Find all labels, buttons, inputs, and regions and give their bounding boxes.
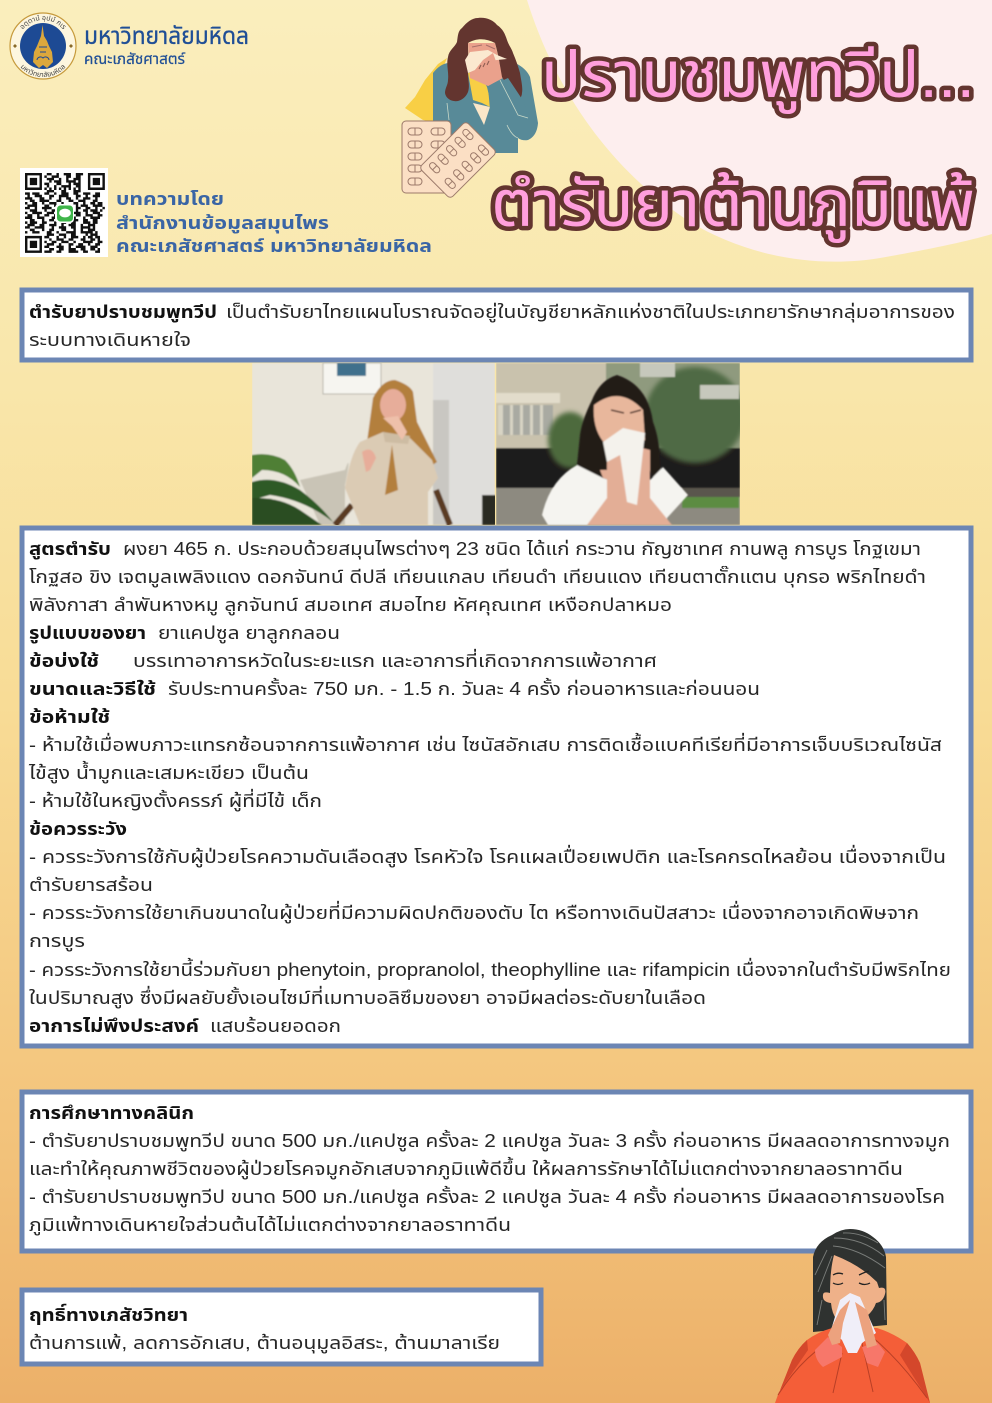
plant [252, 454, 300, 487]
precautions: - ควรระวังการใช้ยาเกินขนาดในผู้ป่วยที่มีความผิดปกติของตับ ไต หรือทางเดินปัสสาวะ เนื่องจากอาจเกิดพิษจาก [29, 900, 919, 925]
photo: woman outdoors [496, 363, 745, 525]
panel: intro [22, 290, 971, 360]
dosage [29, 677, 760, 699]
dosage form [29, 623, 340, 645]
dosage form: รูปแบบของยา [29, 623, 146, 644]
panel: pharmacology: ฤทธิ์ทางเภสัชวิทยา [29, 1303, 188, 1325]
contraindications: - ห้ามใช้เมื่อพบภาวะแทรกซ้อนจากการแพ้อากาศ เช่น ไซนัสอักเสบ การติดเชื้อแบคทีเรียที่มีอาการเจ็บบริเวณไซนัส [29, 732, 942, 755]
pink corner shape [527, 0, 992, 262]
university name: มหาวิทยาลัยมหิดล [84, 23, 249, 50]
precautions [29, 819, 951, 1010]
panel: clinical studies: และทำให้คุณภาพชีวิตของผู้ป่วยโรคจมูกอักเสบจากภูมิแพ้ดีขึ้น ให้ผลการรักษาได้ไม่แตกต่างจากยาลอราทาดีน [29, 1156, 903, 1181]
precautions: ตำรับยารสร้อน [29, 875, 153, 895]
panel: intro: ระบบทางเดินหายใจ [29, 330, 191, 350]
formula: พิลังกาสา ลำพันหางหมู ลูกจันทน์ สมอเทศ สมอไทย หัศคุณเทศ เหงือกปลาหมอ [29, 595, 672, 617]
illustration: woman with tissue [775, 1229, 930, 1403]
precautions: การบูร [29, 931, 85, 953]
author credit: คณะเภสัชศาสตร์ มหาวิทยาลัยมหิดล [116, 236, 432, 256]
title: ตำรับยาต้านภูมิแพ้ [491, 168, 975, 243]
adverse effects [29, 1016, 341, 1036]
university name [84, 23, 249, 68]
chair [335, 490, 450, 525]
university logo [9, 12, 77, 80]
indications [29, 648, 657, 671]
photo: woman indoors [252, 363, 496, 525]
sweater [345, 432, 438, 525]
title: ปราบชมพูทวีป... [541, 39, 975, 114]
precautions: - ควรระวังการใช้ยานี้ร่วมกับยา phenytoin, propranolol, theophylline และ rifampicin เนื่องจากในตำรับมีพริกไทย [29, 957, 951, 980]
contraindications [28, 707, 942, 813]
dosage form: ยาแคปซูล ยาลูกกลอน [158, 623, 340, 645]
dosage: รับประทานครั้งละ 750 มก. - 1.5 ก. วันละ 4 ครั้ง ก่อนอาหารและก่อนนอน [168, 677, 760, 699]
formula: สูตรตำรับ [29, 539, 111, 560]
illustration: woman sneezing with pills [402, 18, 538, 199]
panel: clinical studies: การศึกษาทางคลินิก [29, 1103, 194, 1123]
contraindications: - ห้ามใช้ในหญิงตั้งครรภ์ ผู้ที่มีไข้ เด็ก [29, 788, 322, 813]
contraindications: ไข้สูง น้ำมูกและเสมหะเขียว เป็นต้น [28, 760, 309, 785]
pill pack front [419, 121, 497, 199]
QR code [20, 168, 108, 257]
panel: pharmacology: ต้านการแพ้, ลดการอักเสบ, ต้านอนุมูลอิสระ, ต้านมาลาเรีย [29, 1333, 500, 1355]
precautions: ในปริมาณสูง ซึ่งมีผลยับยั้งเอนไซม์ที่เมทาบอลิซึมของยา อาจมีผลต่อระดับยาในเลือด [29, 985, 706, 1010]
formula: ผงยา 465 ก. ประกอบด้วยสมุนไพรต่างๆ 23 ชนิด ได้แก่ กระวาน กัญชาเทศ กานพลู การบูร โกฐเขมา [123, 539, 921, 561]
author credit: สำนักงานข้อมูลสมุนไพร [116, 213, 329, 234]
indications: ข้อบ่งใช้ [29, 651, 100, 671]
panel: intro: เป็นตำรับยาไทยแผนโบราณจัดอยู่ในบัญชียาหลักแห่งชาติในประเภทยารักษากลุ่มอาการของ [226, 302, 955, 324]
author credit: บทความโดย [116, 189, 224, 209]
panel: clinical studies: - ตำรับยาปราบชมพูทวีป ขนาด 500 มก./แคปซูล ครั้งละ 2 แคปซูล วันละ 4 ครั้ง ก่อนอาหาร มีผลลดอาการของโรค [29, 1185, 945, 1209]
precautions: - ควรระวังการใช้กับผู้ป่วยโรคความดันเลือดสูง โรคหัวใจ โรคแผลเปื่อยเพปติก และโรคกรดไหลย้อน เนื่องจากเป็น [29, 844, 946, 869]
author credit [116, 189, 432, 256]
dosage: ขนาดและวิธีใช้ [29, 679, 157, 699]
university name: คณะเภสัชศาสตร์ [84, 51, 186, 68]
formula [29, 539, 926, 617]
precautions: ข้อควรระวัง [29, 819, 127, 839]
panel: clinical studies: ภูมิแพ้ทางเดินหายใจส่วนต้นได้ไม่แตกต่างจากยาลอราทาดีน [29, 1215, 511, 1237]
contraindications: ข้อห้ามใช้ [29, 707, 111, 727]
panel: intro: ตำรับยาปราบชมพูทวีป [29, 302, 217, 323]
title [491, 39, 975, 243]
university logo: อตฺตานํ อุปมํ กเร [20, 14, 66, 29]
panel: formula details [22, 528, 971, 1046]
adverse effects: อาการไม่พึงประสงค์ [29, 1016, 199, 1036]
university logo: มหาวิทยาลัยมหิดล [20, 64, 66, 77]
panel: clinical studies [22, 1092, 971, 1251]
panel: pharmacology [22, 1290, 541, 1364]
pill pack back [402, 121, 451, 193]
indications: บรรเทาอาการหวัดในระยะแรก และอาการที่เกิดจากการแพ้อากาศ [133, 648, 657, 671]
hair back [366, 379, 438, 465]
formula: โกฐสอ ขิง เจตมูลเพลิงแดง ดอกจันทน์ ดีปลี เทียนแกลบ เทียนดำ เทียนแดง เทียนตาตั๊กแตน บุกรอ พริกไทยดำ [29, 565, 926, 589]
panel: clinical studies: - ตำรับยาปราบชมพูทวีป ขนาด 500 มก./แคปซูล ครั้งละ 2 แคปซูล วันละ 3 ครั้ง ก่อนอาหาร มีผลลดอาการทางจมูก [29, 1129, 950, 1153]
adverse effects: แสบร้อนยอดอก [210, 1016, 341, 1036]
